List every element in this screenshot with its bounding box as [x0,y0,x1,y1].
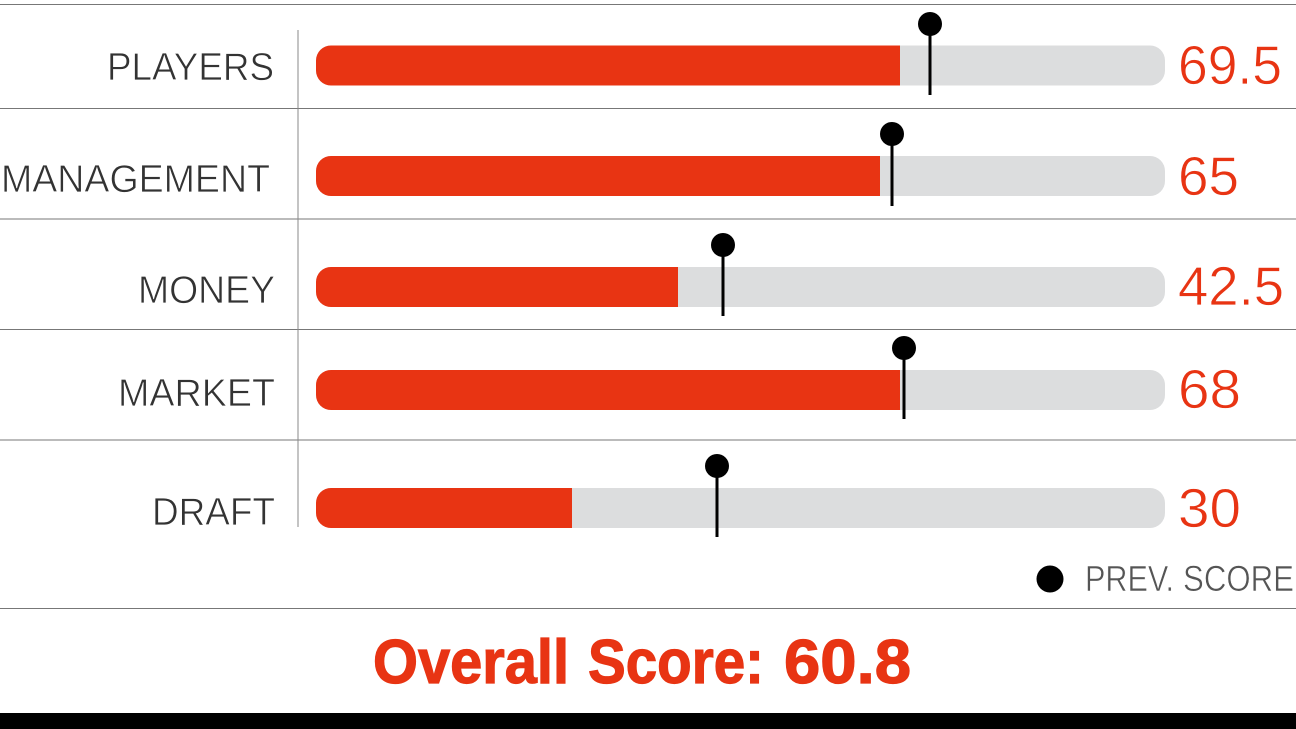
bar: players [316,46,1165,86]
legend: previous score: PREV. [1085,558,1174,599]
value: management: 65 [1178,145,1239,207]
label: draft: DRAFT [152,491,275,534]
bottom black band [0,713,1296,729]
marker: draft previous score [705,454,729,537]
row: management [1,122,1239,207]
marker: players previous score [918,12,942,95]
bar: money [316,267,1165,307]
row: market [118,336,1241,420]
label: money: MONEY [138,269,275,312]
bar: management [316,156,1165,196]
overall score [373,628,911,697]
value: market: 68 [1178,358,1241,420]
overall score: Overall [373,628,569,697]
value: players: 69.5 [1178,34,1282,96]
legend: previous score [1036,558,1294,599]
overall score: Score: [588,628,764,697]
overall score: 60.8 [784,628,911,697]
bar: draft [316,488,1165,528]
value: draft: 30 [1178,477,1241,539]
bar: market [316,370,1165,410]
row: draft [152,454,1241,539]
label: players: PLAYERS [107,46,274,89]
row: money [138,233,1284,317]
row: players [107,12,1282,96]
marker: management previous score [880,122,904,206]
label: management: MANAGEMENT [1,158,270,201]
label: market: MARKET [118,372,275,415]
marker: money previous score [711,233,735,316]
marker: market previous score [892,336,916,419]
value: money: 42.5 [1178,255,1284,317]
